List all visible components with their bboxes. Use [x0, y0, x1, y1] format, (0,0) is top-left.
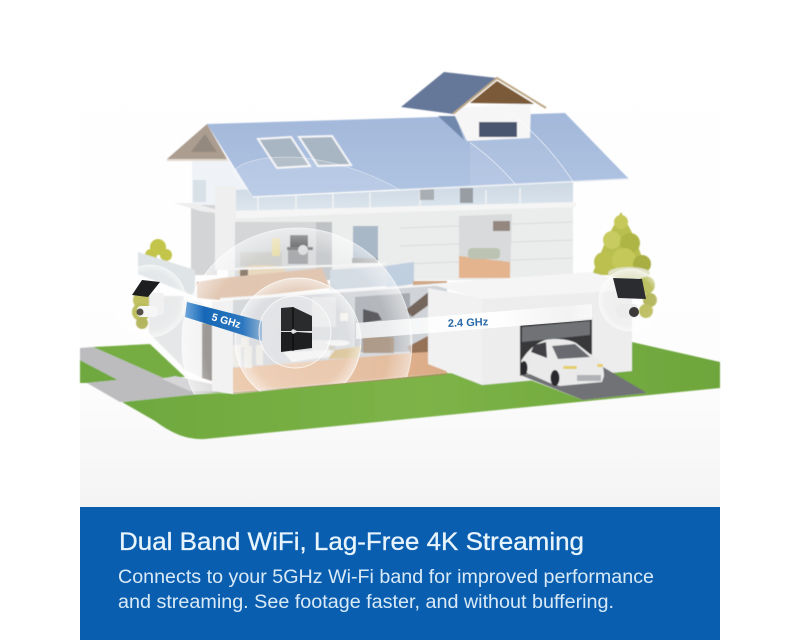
inner bubble	[259, 296, 331, 368]
right tree	[592, 212, 657, 318]
upper glass band	[230, 178, 573, 214]
solar panel	[613, 278, 646, 299]
window on upper wall	[353, 226, 378, 259]
front pillar	[212, 300, 233, 393]
wifi coverage bubbles	[132, 228, 658, 394]
2.4 GHz label: 2.4 GHz	[448, 316, 489, 330]
car	[520, 339, 604, 386]
floor lamp	[340, 313, 348, 321]
upper house wall	[228, 190, 573, 280]
tv cabinet	[363, 337, 394, 353]
garage door inner	[522, 321, 590, 342]
2.4 GHz band	[356, 304, 592, 339]
router	[281, 307, 312, 352]
driveway	[520, 367, 647, 400]
dormer gable	[470, 81, 534, 104]
camera body	[616, 304, 638, 318]
roof edge	[253, 179, 629, 197]
walkway	[80, 347, 220, 402]
main roof	[207, 113, 629, 197]
band window	[420, 189, 434, 200]
lens	[629, 307, 639, 317]
infographic	[79, 71, 721, 640]
upper left balcony	[138, 252, 195, 296]
balcony rail top	[220, 264, 447, 299]
dormer	[401, 72, 546, 141]
lens	[136, 308, 144, 316]
5 GHz label: 5 GHz	[210, 311, 242, 331]
entrance steps	[162, 376, 216, 391]
house illustration	[80, 72, 720, 439]
left tree	[132, 239, 172, 329]
front left lawn patch	[93, 344, 185, 378]
camera body	[137, 306, 158, 317]
left roof dome	[233, 157, 400, 197]
dormer shadow	[438, 116, 464, 140]
lower floor window	[312, 297, 336, 327]
bubble: right camera	[599, 269, 661, 331]
left annex wall	[149, 296, 184, 368]
wall panel	[316, 222, 332, 280]
dining chairs	[233, 337, 263, 368]
garage front	[482, 284, 632, 385]
rug	[328, 346, 362, 359]
blue caption banner	[80, 507, 720, 640]
band window	[460, 188, 473, 203]
small glass balcony	[386, 262, 414, 288]
garage left side	[428, 288, 482, 385]
skylights	[258, 136, 351, 168]
siding lines	[400, 222, 573, 264]
dormer trim	[453, 78, 546, 114]
glass upper left corner	[192, 160, 253, 205]
bubble: middle	[235, 278, 361, 404]
left canopy	[174, 203, 215, 213]
staircase	[406, 290, 431, 353]
bubble: whole floor	[182, 228, 412, 394]
window sill	[352, 258, 378, 263]
bedroom bed	[238, 238, 286, 279]
description line 1: Connects to your 5GHz Wi-Fi band for improved performance	[118, 567, 654, 588]
lower floor	[233, 350, 447, 392]
solar panel	[132, 280, 160, 297]
right camera	[613, 278, 646, 318]
bedroom desk	[287, 235, 313, 264]
image panel background	[80, 40, 720, 507]
left camera	[132, 280, 164, 317]
5 GHz band	[185, 302, 262, 341]
large outer roof domes	[470, 123, 574, 184]
glass band mullions	[258, 188, 520, 213]
coffee table	[326, 340, 350, 346]
upper floor glass rail	[330, 266, 387, 290]
bathroom room	[459, 214, 512, 278]
description line 2: and streaming. See footage faster, and without buffering.	[118, 592, 614, 613]
dormer roof	[401, 72, 497, 114]
upper bedroom wall	[235, 222, 330, 280]
left gable	[167, 124, 229, 161]
balcony glass by stairwell	[193, 180, 206, 202]
floor front edge	[233, 374, 447, 393]
lower left lawn patch	[80, 360, 118, 383]
upper floor right tan	[413, 281, 447, 287]
upper floor tan	[197, 268, 330, 300]
heading: Dual Band WiFi, Lag-Free 4K Streaming	[119, 528, 584, 556]
upper left side wall	[191, 205, 217, 275]
lower floor back wall	[233, 285, 447, 368]
sofa	[283, 340, 335, 362]
garage door	[520, 319, 592, 376]
dormer window	[479, 122, 517, 137]
garage top	[430, 272, 632, 299]
television	[363, 309, 382, 323]
front door	[202, 323, 212, 381]
upper ledge	[226, 202, 576, 219]
garage	[428, 272, 647, 400]
bubble: left camera	[132, 264, 186, 337]
main lawn	[122, 342, 720, 439]
white pillar	[215, 186, 236, 270]
lower floor dark wall	[355, 293, 410, 352]
mount	[150, 293, 164, 315]
entrance wall	[182, 300, 202, 378]
dormer body	[453, 103, 531, 141]
